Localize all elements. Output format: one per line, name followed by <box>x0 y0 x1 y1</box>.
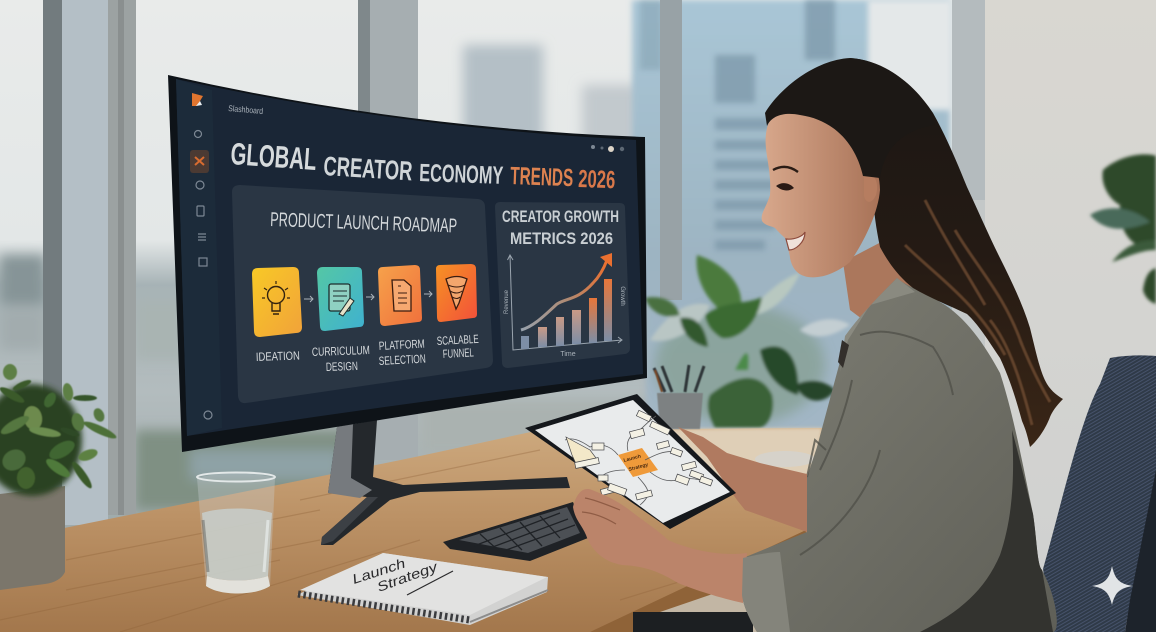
step labels: SCALABLE <box>436 332 479 348</box>
handwritten title <box>350 556 441 595</box>
plant leaves <box>0 364 118 496</box>
dashboard title: GLOBAL <box>230 136 318 177</box>
chart axes <box>508 255 622 350</box>
step labels: FUNNEL <box>442 345 474 361</box>
hand holding tablet top <box>678 427 807 532</box>
step labels: SELECTION <box>378 352 426 368</box>
hair over the shoulder <box>850 58 1063 447</box>
sidebar <box>176 79 222 436</box>
handwritten title: Launch <box>350 556 407 587</box>
chart axis labels: Revenue <box>504 289 510 314</box>
hand gripping tablet <box>573 489 747 603</box>
metrics heading: CREATOR GROWTH <box>502 207 619 226</box>
screen <box>176 79 643 436</box>
shirt shadow <box>920 430 1053 632</box>
arrow <box>366 294 374 300</box>
mind map branches <box>565 416 700 505</box>
icon: lightbulb, ideation <box>252 267 302 337</box>
arrow <box>304 296 313 302</box>
desk surface <box>0 428 822 632</box>
top bar status dots <box>591 145 624 152</box>
mind map center node <box>618 448 658 477</box>
dashboard title: TRENDS <box>510 162 574 192</box>
chart bars <box>521 279 612 349</box>
mind map nodes <box>566 410 713 500</box>
handwritten title: Strategy <box>375 559 441 595</box>
plant behind the desk <box>645 255 850 428</box>
face <box>762 105 880 277</box>
dashboard title: 2026 <box>578 165 616 194</box>
panel: creator growth metrics <box>495 202 630 368</box>
plant on the right wall <box>1090 154 1156 304</box>
dashboard title <box>230 136 616 194</box>
monitor bezel <box>168 75 647 452</box>
roadmap heading: PRODUCT LAUNCH ROADMAP <box>270 209 457 238</box>
icon: document, platform selection <box>378 265 422 326</box>
chart axis labels: Growth <box>619 286 625 306</box>
step labels <box>256 332 479 374</box>
wireless keyboard <box>443 502 588 561</box>
chart axis labels <box>504 286 625 358</box>
hair top <box>765 58 935 178</box>
growth chart <box>504 253 625 358</box>
collar and placket <box>840 278 915 372</box>
step labels: IDEATION <box>256 348 300 364</box>
mind map center node: Strategy <box>628 462 649 473</box>
icon: notes, curriculum design <box>317 267 364 331</box>
mind map center node: Launch <box>623 454 642 464</box>
notebook with handwriting <box>297 553 548 625</box>
arrow <box>424 291 432 297</box>
hair highlights <box>905 200 1050 425</box>
window frames <box>43 0 985 535</box>
wall and floor on the right <box>952 0 1156 632</box>
ear <box>864 174 877 202</box>
top bar label: Slashboard <box>228 103 264 116</box>
step labels: PLATFORM <box>378 337 425 353</box>
monitor stand <box>321 420 570 545</box>
sparkle mark <box>1092 566 1133 605</box>
sidebar icons <box>190 130 212 419</box>
shirt cuff <box>742 552 790 632</box>
shirt <box>742 278 1057 632</box>
icon: funnel, scalable funnel <box>436 264 477 322</box>
potted plant on the left <box>0 364 118 590</box>
step labels: DESIGN <box>326 359 358 374</box>
glass of water <box>197 472 275 594</box>
chart axis labels: Time <box>560 351 576 358</box>
dashboard title: ECONOMY <box>419 159 504 190</box>
eye, brow and smile <box>773 167 805 250</box>
growth arrow <box>521 253 612 330</box>
woman <box>678 58 1063 632</box>
dashboard title: CREATOR <box>323 151 413 186</box>
plant pot <box>0 486 65 590</box>
chair <box>1043 355 1156 632</box>
pen cup <box>654 365 704 429</box>
metrics heading <box>502 207 619 248</box>
white pad on desk <box>755 451 815 467</box>
monitor <box>168 75 647 452</box>
panel: product launch roadmap <box>232 185 493 403</box>
sleeve folds <box>756 332 953 598</box>
logo mark <box>192 93 203 106</box>
step labels: CURRICULUM <box>312 343 370 359</box>
tablet with mind map <box>525 394 736 529</box>
neck <box>843 240 915 325</box>
fingers on tablet <box>582 498 620 524</box>
metrics heading: METRICS 2026 <box>510 229 613 248</box>
